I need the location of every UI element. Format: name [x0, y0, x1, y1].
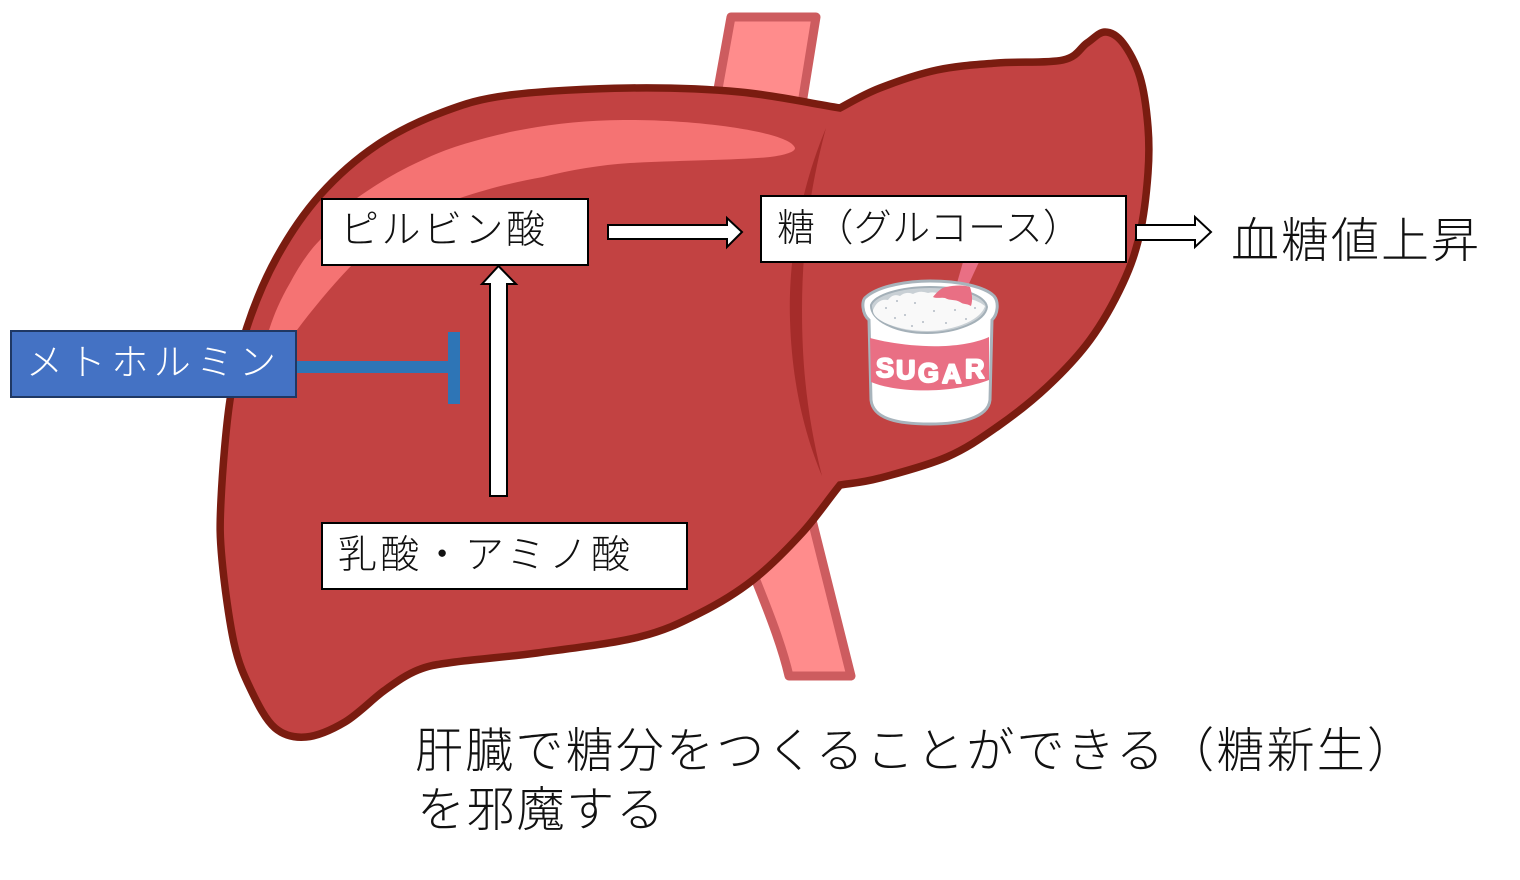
pot label text: SUGAR — [876, 353, 984, 389]
arrow: pyruvic acid to glucose — [608, 218, 742, 247]
spoon bowl — [933, 286, 972, 306]
spoon handle — [955, 262, 979, 290]
liver body — [220, 32, 1149, 737]
sugar surface — [873, 292, 985, 331]
box: glucose — [761, 196, 1126, 262]
sugar grains — [885, 300, 976, 327]
liver lobe crease — [790, 128, 826, 476]
box: pyruvic acid — [322, 199, 588, 265]
icon: sugar pot — [863, 262, 997, 424]
liver — [220, 32, 1149, 737]
box: lactic acid and amino acids — [322, 523, 687, 589]
liver highlight — [262, 120, 795, 350]
caption: 肝臓で糖分をつくることができる（糖新生） — [415, 725, 1415, 778]
pot label band — [870, 337, 989, 390]
box: metformin: メトホルミン — [26, 342, 276, 383]
box: glucose: 糖（グルコース） — [777, 208, 1081, 250]
pot body and rim — [863, 281, 997, 424]
label: blood sugar rise: 血糖値上昇 — [1231, 215, 1479, 268]
inhibition line: metformin — [296, 332, 460, 404]
caption: を邪魔する — [417, 784, 664, 837]
box: lactic acid and amino acids: 乳酸・アミノ酸 — [338, 534, 630, 577]
caption — [415, 725, 1415, 837]
box: pyruvic acid: ピルビン酸 — [340, 209, 545, 252]
blood vessel: lower — [755, 520, 851, 676]
arrow: lactic acid up to pyruvic acid — [482, 266, 516, 496]
box: metformin — [11, 331, 296, 397]
arrow: glucose to blood sugar rise — [1136, 217, 1211, 247]
pot opening — [871, 287, 987, 333]
blood vessel: upper — [716, 17, 816, 110]
